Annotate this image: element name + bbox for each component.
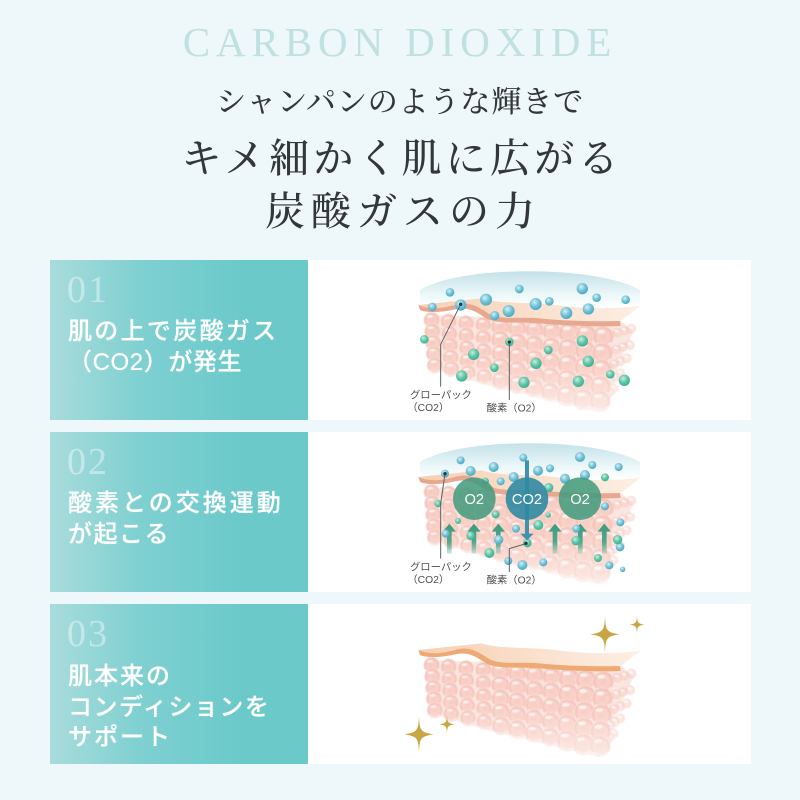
- step 03 label: 肌本来の: [68, 663, 172, 690]
- diagram labels: （CO2）: [407, 574, 449, 586]
- step 01 label: 01: [67, 269, 109, 311]
- air dome: [420, 443, 640, 479]
- leader lines: [441, 304, 509, 400]
- step 03 label: コンディションを: [68, 694, 270, 720]
- CO2 bubbles: [428, 283, 630, 320]
- title: CARBON DIOXIDE: CARBON DIOXIDE: [183, 19, 617, 65]
- panel: step 03: [50, 604, 751, 764]
- skin surface: [418, 643, 641, 671]
- skin surface: [418, 298, 641, 326]
- heading line 2: 炭酸ガスの力: [265, 189, 541, 234]
- O2 circle left: [453, 477, 496, 520]
- step 01 label: [50, 260, 308, 420]
- O2 circle left: O2: [465, 492, 484, 508]
- heading line 1: キメ細かく肌に広がる: [181, 136, 623, 181]
- CO2 circle: CO2: [512, 492, 542, 508]
- illustration: restored skin with sparkles: [404, 615, 645, 762]
- diagram labels: 酸素（O2）: [487, 574, 542, 587]
- diagram labels: グローパック: [410, 388, 472, 401]
- step 02 label: 酸素との交換運動: [68, 490, 284, 517]
- step 01 label: 肌の上で炭酸ガス: [68, 318, 278, 345]
- oxygen bubbles: [434, 473, 622, 562]
- diagram labels: （CO2）: [407, 402, 449, 414]
- skin cells: [420, 312, 638, 417]
- O2 circle right: O2: [570, 492, 590, 508]
- skin cells: [420, 657, 638, 762]
- step 02 label: [50, 432, 308, 592]
- step 02 label: 02: [67, 441, 109, 483]
- sparkles: [404, 615, 645, 753]
- green up arrows: [443, 524, 611, 554]
- leader lines: [441, 474, 526, 572]
- diagram labels: 酸素（O2）: [487, 402, 542, 415]
- CO2 bubbles: [441, 452, 625, 572]
- oxygen bubbles: [420, 335, 630, 388]
- CO2 circle: [506, 477, 548, 520]
- diagram labels: [407, 560, 542, 587]
- diagram labels: グローパック: [410, 560, 472, 573]
- step 01 label: （CO2）が発生: [68, 349, 242, 376]
- panel: step 02: [50, 432, 751, 592]
- illustration: skin with CO2 bubbles and oxygen: [407, 271, 641, 417]
- skin surface: [418, 470, 641, 498]
- skin cells: [420, 484, 638, 589]
- diagram labels: [407, 388, 542, 415]
- illustration: oxygen exchange: [407, 443, 641, 589]
- panel: step 01: [50, 260, 751, 420]
- subheading: シャンパンのような輝きで: [216, 86, 584, 119]
- step 03 label: 03: [67, 613, 109, 655]
- blue down arrow: [520, 460, 534, 540]
- O2 circle right: [559, 477, 601, 520]
- step 03 label: サポート: [68, 724, 172, 751]
- air dome: [420, 271, 640, 307]
- step 02 label: が起こる: [68, 521, 170, 548]
- step 03 label: [50, 604, 308, 764]
